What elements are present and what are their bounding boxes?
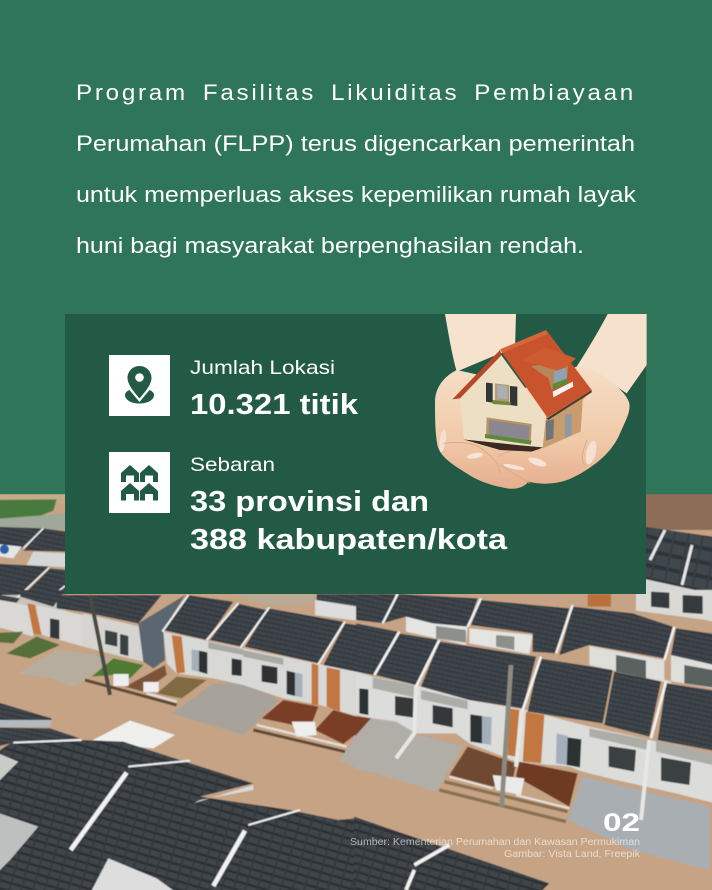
toy house — [452, 330, 592, 452]
cupped hands — [435, 367, 630, 489]
page number: 02 — [603, 809, 640, 837]
intro paragraph — [76, 80, 637, 258]
intro paragraph: Perumahan (FLPP) terus digencarkan pemerintah — [76, 131, 635, 156]
photo: left half houses — [0, 590, 360, 890]
photo: right strip above the rows — [640, 494, 712, 624]
intro paragraph: untuk memperluas akses kepemilikan rumah layak — [76, 182, 637, 207]
source credit: Gambar: Vista Land, Freepik — [504, 849, 641, 860]
stat: sebaran: Sebaran — [190, 454, 275, 476]
stat: jumlah lokasi — [190, 357, 359, 421]
stat: jumlah lokasi: 10.321 titik — [190, 389, 359, 421]
illustration: hands holding a house — [435, 314, 647, 489]
icon: four houses — [109, 452, 170, 513]
photo: housing complex — [0, 494, 712, 890]
stat: sebaran: 33 provinsi dan — [190, 486, 429, 518]
photo: right half houses — [354, 590, 712, 890]
stat: jumlah lokasi: Jumlah Lokasi — [190, 357, 335, 379]
source credit: Sumber: Kementerian Perumahan dan Kawasan Permukiman — [350, 837, 640, 848]
left arm — [445, 314, 516, 372]
icon: location pin — [109, 355, 170, 416]
right arm — [577, 314, 647, 393]
intro paragraph: Program Fasilitas Likuiditas Pembiayaan — [76, 80, 636, 105]
intro paragraph: huni bagi masyarakat berpenghasilan rendah. — [76, 233, 584, 258]
main panel — [65, 314, 646, 594]
stat: sebaran — [190, 454, 508, 556]
source credit — [350, 837, 641, 860]
photo: left strip above the rows — [0, 494, 67, 613]
stat: sebaran: 388 kabupaten/kota — [190, 524, 508, 556]
